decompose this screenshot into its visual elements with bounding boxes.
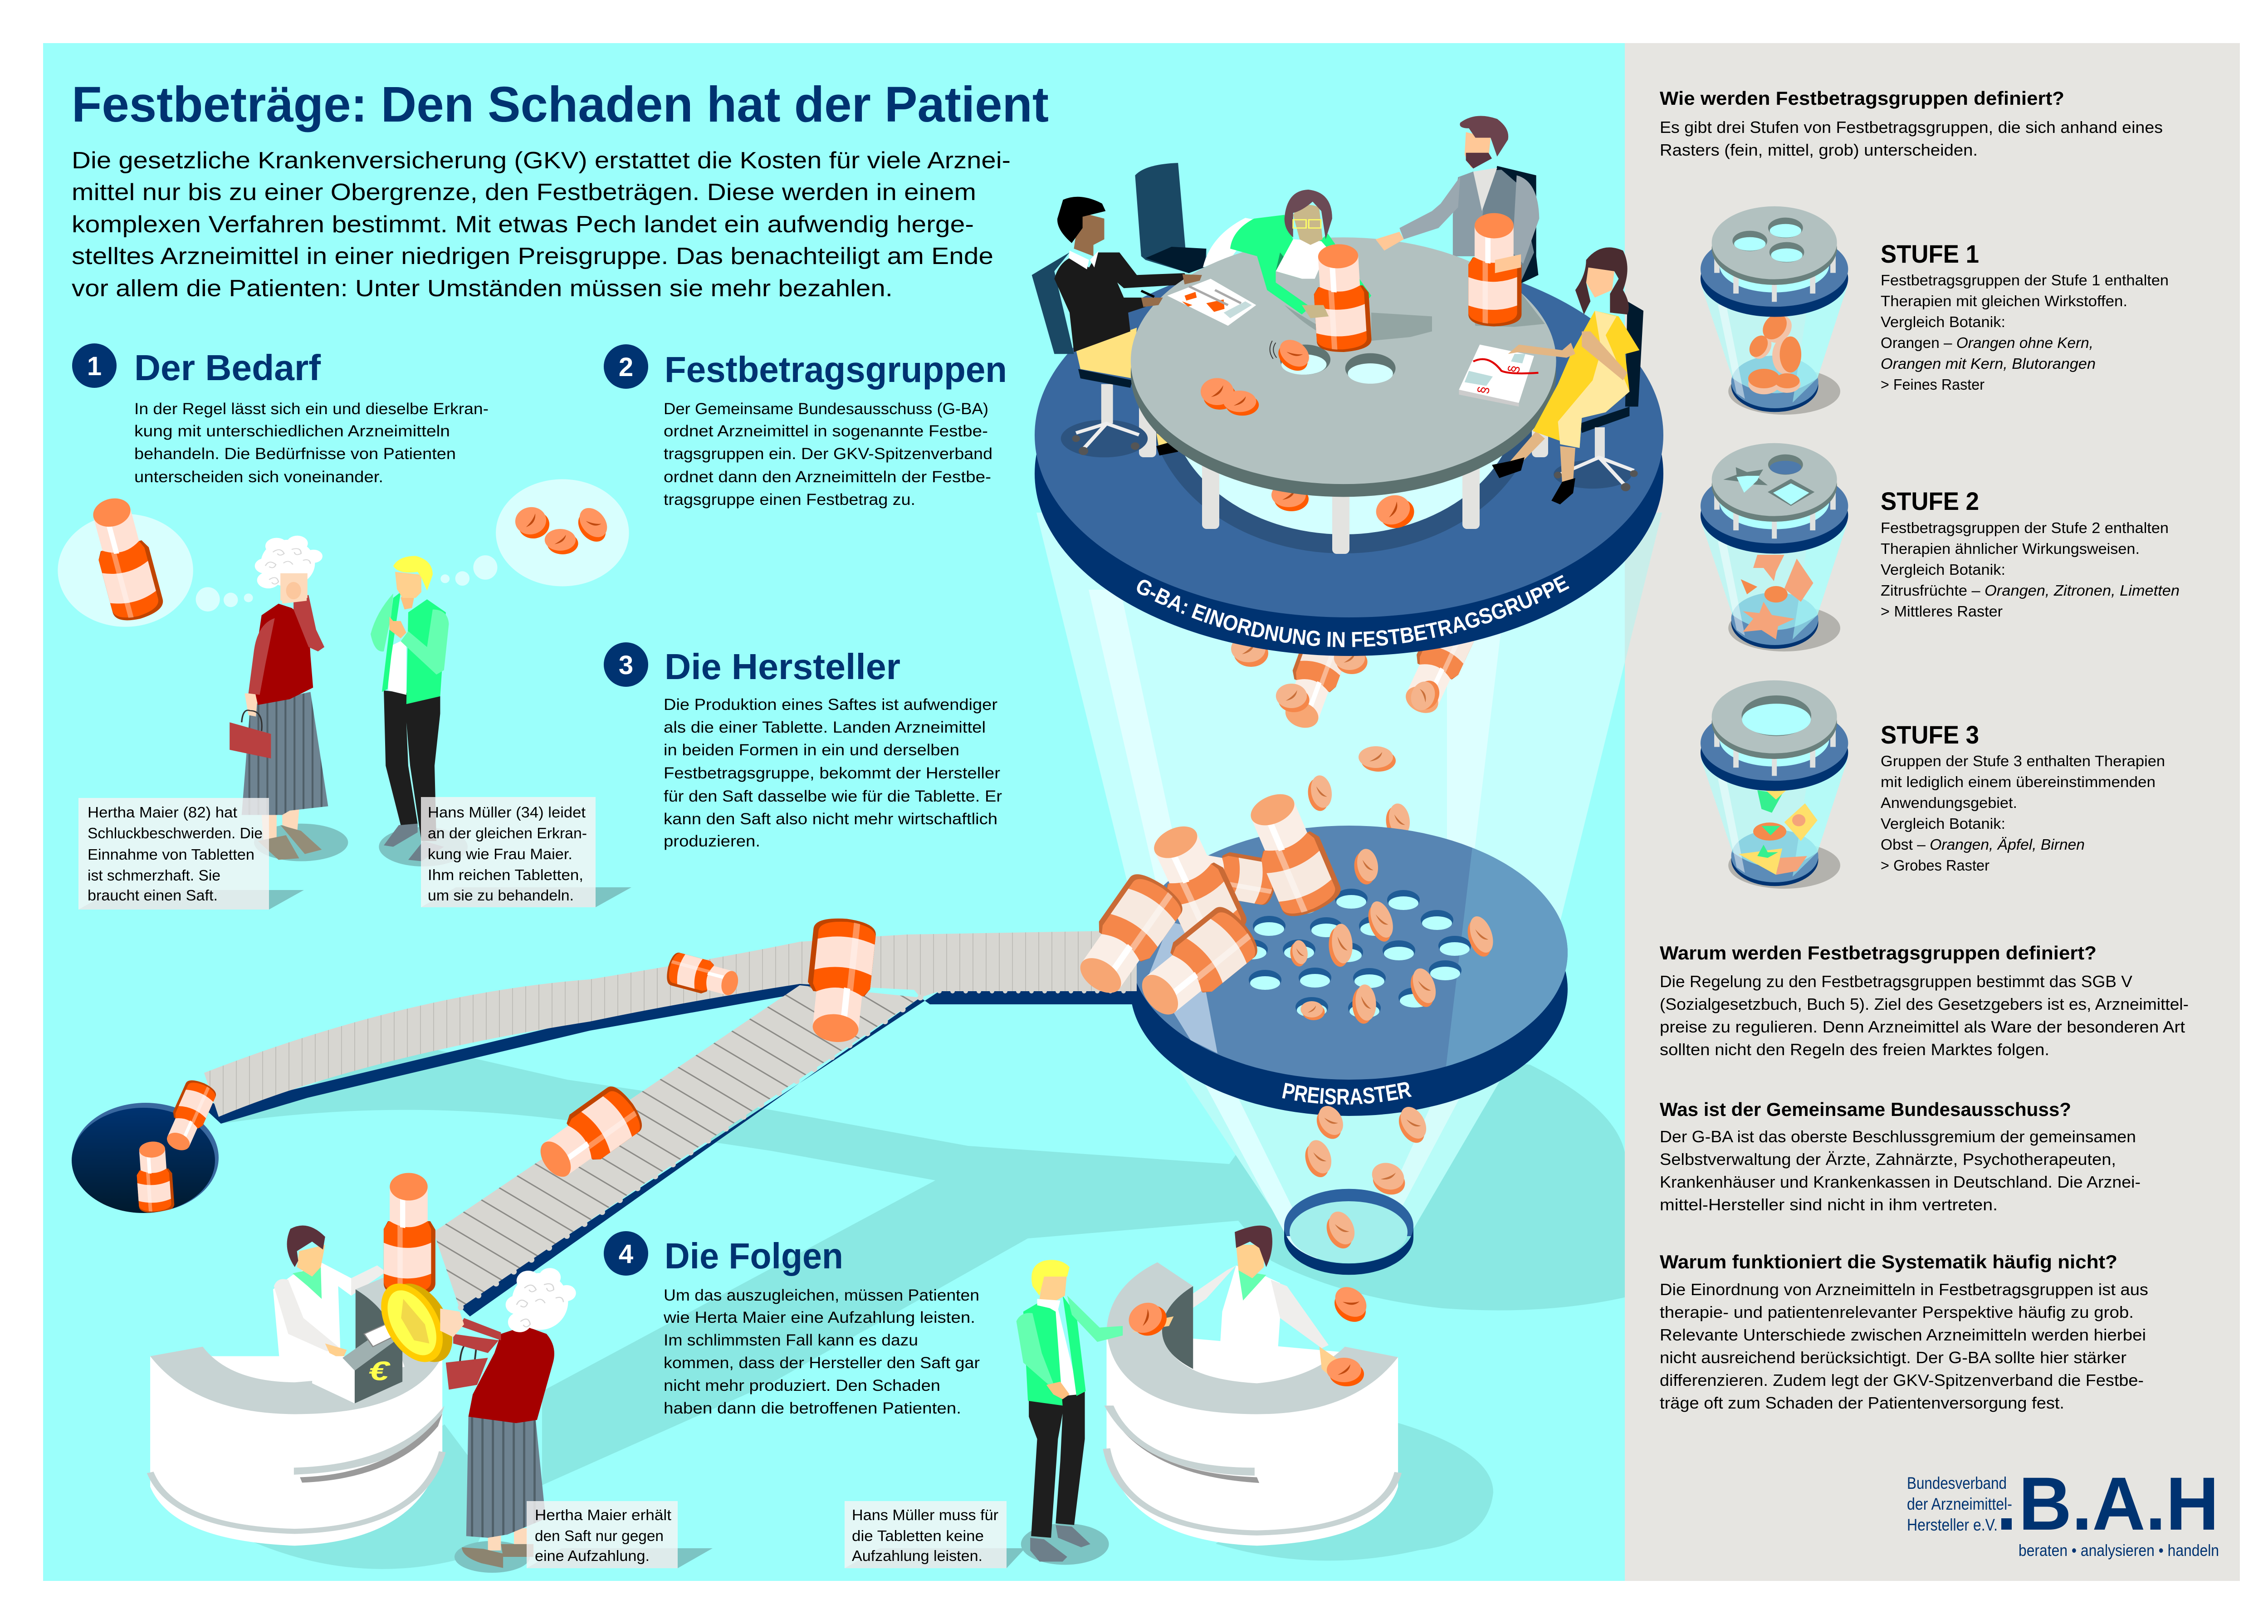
Stufe 3 text: STUFE 3 bbox=[1881, 720, 1979, 749]
Stufe 2 text: STUFE 2 bbox=[1881, 487, 1979, 515]
counter body bbox=[1104, 1262, 1398, 1546]
FAQ: Warum funktioniert: träge oft zum Schaden der Patientenversorgung fest. bbox=[1660, 1394, 2064, 1412]
section 2: Festbetragsgruppen: ordnet dann den Arzneimitteln der Festbe- bbox=[664, 468, 991, 486]
Stufe 3 text: Gruppen der Stufe 3 enthalten Therapien bbox=[1881, 753, 2165, 769]
person: Hertha standing bbox=[230, 536, 348, 861]
tablets below the sieve bbox=[1300, 1101, 1433, 1199]
callout: Hans keine Aufzahlung: Aufzahlung leisten. bbox=[852, 1547, 982, 1564]
FAQ: Was ist der G-BA: Selbstverwaltung der Ärzte, Zahnärzte, Psychotherapeuten, bbox=[1660, 1150, 2116, 1169]
intro text: Die gesetzliche Krankenversicherung (GKV) erstattet die Kosten für viele Arznei- bbox=[72, 147, 1011, 174]
right grey panel bbox=[1625, 43, 2240, 1581]
person: Hans standing bbox=[371, 556, 468, 866]
callout: Hans Müller: Hans Müller (34) leidet bbox=[428, 804, 586, 821]
upper funnel beam bbox=[1036, 513, 1662, 1052]
tablet below ring bbox=[1326, 1281, 1374, 1328]
hands on bottles bbox=[1302, 254, 1521, 318]
section 4: Die Folgen: Im schlimmsten Fall kann es dazu bbox=[664, 1331, 918, 1349]
document on table bbox=[1167, 279, 1256, 326]
coin and Hertha paying bbox=[369, 1268, 576, 1573]
Stufe 2 text: Zitrusfrüchte – Orangen, Zitronen, Limetten bbox=[1881, 582, 2180, 599]
tablets on the sieve bbox=[1288, 847, 1499, 1025]
callout: Hertha Aufzahlung: den Saft nur gegen bbox=[535, 1527, 664, 1544]
section 3: Die Hersteller: 3 bbox=[619, 651, 633, 680]
FAQ: Was ist der G-BA bbox=[1660, 1099, 2141, 1214]
section 2: Festbetragsgruppen bbox=[604, 344, 1007, 509]
belt: diagonal branch bbox=[434, 985, 920, 1308]
right panel intro: Rasters (fein, mittel, grob) unterscheiden. bbox=[1660, 141, 1978, 159]
falling tablets bbox=[1231, 635, 1443, 841]
callout: Hertha Maier bbox=[78, 798, 304, 910]
callout: Hertha Aufzahlung bbox=[527, 1501, 713, 1568]
lower disc: Preisraster bbox=[1130, 817, 1588, 1116]
FAQ: Warum funktioniert: Relevante Unterschiede zwischen Arzneimitteln werden hierbei bbox=[1660, 1326, 2146, 1344]
thought bubble: Hertha bbox=[58, 514, 253, 627]
FAQ: Warum funktioniert: Warum funktioniert die Systematik häufig nicht? bbox=[1660, 1251, 2117, 1272]
intro text bbox=[72, 147, 1011, 302]
Stufe 2 text: Vergleich Botanik: bbox=[1881, 561, 2005, 578]
section 3: Die Hersteller: in beiden Formen in ein und derselben bbox=[664, 741, 959, 759]
callout: Hertha Maier: Hertha Maier (82) hat bbox=[88, 804, 237, 821]
FAQ: Warum funktioniert: nicht ausreichend berücksichtigt. Der G-BA sollte hier stärker bbox=[1660, 1348, 2126, 1367]
thought bubble: Hans bbox=[440, 479, 629, 586]
bottle over counter bbox=[384, 1173, 435, 1296]
law book bbox=[1459, 345, 1538, 406]
callout: Hans Müller bbox=[421, 797, 631, 907]
chair: empty bbox=[1135, 163, 1206, 273]
Stufe 2 text: Therapien ähnlicher Wirkungsweisen. bbox=[1881, 540, 2140, 557]
logo: B.A.H: der Arzneimittel- bbox=[1907, 1495, 2012, 1513]
tablet handed over bbox=[1123, 1296, 1172, 1343]
callout: Hans Müller: an der gleichen Erkran- bbox=[428, 825, 587, 841]
lower funnel beam bbox=[1179, 1071, 1506, 1259]
tablets under the table bbox=[1271, 483, 1418, 533]
callout: Hans keine Aufzahlung: Hans Müller muss für bbox=[852, 1507, 998, 1523]
Stufe 1 text: Orangen mit Kern, Blutorangen bbox=[1881, 355, 2096, 372]
callout: Hertha Maier: Schluckbeschwerden. Die bbox=[88, 825, 263, 841]
person: bearded man bbox=[1399, 116, 1539, 286]
section 1: Der Bedarf: 1 bbox=[87, 352, 102, 381]
Stufe 3 text: Obst – Orangen, Äpfel, Birnen bbox=[1881, 836, 2085, 853]
FAQ: Warum funktioniert bbox=[1660, 1251, 2148, 1412]
right panel intro: Wie werden Festbetragsgruppen definiert? bbox=[1660, 88, 2064, 109]
section 3: Die Hersteller: für den Saft dasselbe wie für die Tablette. Er bbox=[664, 788, 1002, 805]
white chair back bbox=[1203, 218, 1258, 268]
meeting scene bbox=[1032, 116, 1643, 504]
right counter with pharmacist bbox=[1017, 1226, 1398, 1565]
intro text: vor allem die Patienten: Unter Umständen müssen sie mehr bezahlen. bbox=[72, 275, 893, 302]
callout: Hertha Maier: Einnahme von Tabletten bbox=[88, 846, 254, 863]
section 2: Festbetragsgruppen: 2 bbox=[619, 352, 633, 382]
FAQ: Warum funktioniert: therapie- und patientenrelevanter Perspektive häufig zu grob. bbox=[1660, 1303, 2134, 1321]
cash register bbox=[312, 1321, 402, 1404]
collecting ring bbox=[1284, 1189, 1413, 1275]
callout: Hertha Maier: ist schmerzhaft. Sie bbox=[88, 867, 220, 884]
G-BA disc with meeting table bbox=[1035, 245, 1663, 656]
section 4: Die Folgen: Um das auszugleichen, müssen Patienten bbox=[664, 1286, 979, 1304]
section 1: Der Bedarf: behandeln. Die Bedürfnisse von Patienten bbox=[134, 445, 456, 463]
person: pharmacist left bbox=[273, 1225, 386, 1385]
sieve holes bbox=[1235, 889, 1471, 1018]
label: G-BA: G-BA: EINORDNUNG IN FESTBETRAGSGRUPPE bbox=[1132, 571, 1572, 652]
right panel intro bbox=[1660, 88, 2163, 159]
FAQ: Warum werden bbox=[1660, 942, 2189, 1059]
logo: B.A.H: Bundesverband bbox=[1907, 1474, 2007, 1492]
Stufe 2 text: > Mittleres Raster bbox=[1881, 603, 2003, 620]
FAQ: Was ist der G-BA: Krankenhäuser und Krankenkassen in Deutschland. Die Arznei- bbox=[1660, 1173, 2141, 1191]
coin bbox=[369, 1278, 464, 1368]
bottles on the conveyor bbox=[530, 915, 877, 1188]
left counter with pharmacist bbox=[150, 1225, 445, 1546]
section 2: Festbetragsgruppen: tragsgruppen ein. Der GKV-Spitzenverband bbox=[664, 445, 992, 463]
FAQ: Was ist der G-BA: Was ist der Gemeinsame Bundesausschuss? bbox=[1660, 1099, 2071, 1120]
section 4: Die Folgen: Die Folgen bbox=[665, 1236, 843, 1276]
right panel intro: Es gibt drei Stufen von Festbetragsgruppen, die sich anhand eines bbox=[1660, 118, 2163, 137]
callout: Hertha Aufzahlung: eine Aufzahlung. bbox=[535, 1547, 650, 1564]
person: man in black bbox=[1032, 197, 1189, 457]
FAQ: Was ist der G-BA: Der G-BA ist das oberste Beschlussgremium der gemeinsamen bbox=[1660, 1127, 2136, 1146]
icon: Stufe 1 filter bbox=[1701, 206, 1848, 415]
table holes bbox=[1280, 345, 1396, 384]
Stufe 1 text: STUFE 1 bbox=[1881, 240, 1979, 268]
tablet on counter bbox=[1327, 1358, 1364, 1386]
label: Preisraster: PREISRASTER bbox=[1280, 1076, 1413, 1110]
section 3: Die Hersteller: Die Produktion eines Saftes ist aufwendiger bbox=[664, 696, 997, 714]
cash register: € bbox=[368, 1356, 391, 1386]
belt: main section bbox=[871, 930, 1137, 998]
icon: Stufe 3 filter bbox=[1701, 680, 1848, 889]
title: Festbeträge: Den Schaden hat der Patient bbox=[72, 77, 1049, 132]
person: woman in green bbox=[1230, 190, 1371, 314]
Stufe 2 text: Festbetragsgruppen der Stufe 2 enthalten bbox=[1881, 519, 2169, 536]
tablets on the table bbox=[1201, 335, 1317, 416]
bottle cluster on the sieve bbox=[1066, 784, 1345, 1027]
tablets in bubble bbox=[513, 503, 614, 554]
Stufe 1 text bbox=[1881, 240, 2169, 393]
logo: B.A.H: B.A.H bbox=[2019, 1462, 2219, 1546]
fruit shapes bbox=[1739, 790, 1818, 875]
table legs bbox=[1139, 390, 1548, 554]
Stufe 3 text bbox=[1881, 720, 2165, 874]
Stufe 1 text: > Feines Raster bbox=[1881, 376, 1984, 393]
sieve holes bbox=[1723, 455, 1814, 506]
counter body bbox=[150, 1277, 445, 1546]
Stufe 3 text: mit lediglich einem übereinstimmenden bbox=[1881, 773, 2156, 790]
intro text: mittel nur bis zu einer Obergrenze, den Festbeträgen. Diese werden in einem bbox=[72, 179, 976, 205]
section 3: Die Hersteller bbox=[604, 642, 1002, 850]
law book: § bbox=[1505, 364, 1522, 374]
sieve opening bbox=[1741, 695, 1811, 736]
hand with coin bbox=[440, 1308, 464, 1337]
section 2: Festbetragsgruppen: Festbetragsgruppen bbox=[665, 349, 1007, 390]
FAQ: Was ist der G-BA: mittel-Hersteller sind nicht in ihm vertreten. bbox=[1660, 1195, 1998, 1214]
section 4: Die Folgen: nicht mehr produziert. Den Schaden bbox=[664, 1377, 940, 1394]
person: woman in yellow bbox=[1492, 247, 1643, 504]
FAQ: Warum werden: preise zu regulieren. Denn Arzneimittel als Ware der besonderen Art bbox=[1660, 1017, 2185, 1036]
FAQ: Warum werden: Die Regelung zu den Festbetragsgruppen bestimmt das SGB V bbox=[1660, 972, 2132, 991]
Stufe 1 text: Orangen – Orangen ohne Kern, bbox=[1881, 334, 2093, 351]
Stufe 2 text bbox=[1881, 487, 2180, 620]
section 4: Die Folgen: 4 bbox=[619, 1239, 633, 1269]
table bbox=[1131, 237, 1556, 497]
section 4: Die Folgen bbox=[604, 1231, 980, 1417]
section 1: Der Bedarf: unterscheiden sich voneinander. bbox=[134, 468, 383, 486]
conveyor belt bbox=[183, 930, 1139, 1316]
tablets bbox=[1746, 310, 1801, 394]
fruit shapes bbox=[1741, 555, 1813, 640]
section 3: Die Hersteller: Festbetragsgruppe, bekommt der Hersteller bbox=[664, 764, 1000, 782]
logo: B.A.H: Hersteller e.V. bbox=[1907, 1516, 1998, 1534]
intro text: komplexen Verfahren bestimmt. Mit etwas Pech landet ein aufwendig herge- bbox=[72, 211, 974, 238]
callout: Hans keine Aufzahlung: die Tabletten keine bbox=[852, 1527, 984, 1544]
section 1: Der Bedarf bbox=[72, 343, 489, 486]
floor shadows bbox=[221, 1043, 1625, 1569]
section 4: Die Folgen: wie Herta Maier eine Aufzahlung leisten. bbox=[663, 1309, 975, 1326]
callout: Hertha Aufzahlung: Hertha Maier erhält bbox=[535, 1507, 671, 1523]
logo: B.A.H bbox=[1907, 1462, 2219, 1560]
Stufe 3 text: Vergleich Botanik: bbox=[1881, 815, 2005, 832]
belt: left branch bbox=[204, 934, 939, 1117]
Stufe 1 text: Vergleich Botanik: bbox=[1881, 313, 2005, 330]
section 3: Die Hersteller: produzieren. bbox=[664, 832, 760, 850]
Stufe 3 text: > Grobes Raster bbox=[1881, 857, 1989, 874]
FAQ: Warum funktioniert: Die Einordnung von Arzneimitteln in Festbetragsgruppen ist aus bbox=[1660, 1280, 2148, 1299]
left cyan panel bbox=[43, 43, 1625, 1581]
bottle in bubble bbox=[84, 492, 166, 625]
FAQ: Warum funktioniert: differenzieren. Zudem legt der GKV-Spitzenverband die Festbe- bbox=[1660, 1371, 2144, 1389]
section 1: Der Bedarf: kung mit unterschiedlichen Arzneimitteln bbox=[134, 422, 450, 440]
section 3: Die Hersteller: als die einer Tablette. Landen Arzneimittel bbox=[664, 719, 986, 736]
section 2: Festbetragsgruppen: ordnet Arzneimittel in sogenannte Festbe- bbox=[664, 422, 988, 440]
Stufe 3 text: Anwendungsgebiet. bbox=[1881, 794, 2017, 811]
bottle on the table: right bbox=[1468, 213, 1521, 327]
section 4: Die Folgen: haben dann die betroffenen Patienten. bbox=[664, 1399, 961, 1417]
Stufe 1 text: Therapien mit gleichen Wirkstoffen. bbox=[1881, 293, 2127, 309]
callout: Hans Müller: um sie zu behandeln. bbox=[428, 887, 574, 904]
section 1: Der Bedarf: Der Bedarf bbox=[134, 347, 321, 388]
FAQ: Warum werden: Warum werden Festbetragsgruppen definiert? bbox=[1660, 942, 2097, 964]
section 2: Festbetragsgruppen: tragsgruppe einen Festbetrag zu. bbox=[664, 491, 915, 509]
section 4: Die Folgen: kommen, dass der Hersteller den Saft gar bbox=[664, 1354, 980, 1372]
section 3: Die Hersteller: Die Hersteller bbox=[665, 646, 900, 687]
person: pharmacist right bbox=[1167, 1226, 1329, 1385]
hands on table bbox=[1141, 232, 1404, 307]
FAQ: Warum werden: sollten nicht den Regeln des freien Marktes folgen. bbox=[1660, 1040, 2049, 1059]
belt: blue side bbox=[183, 982, 1139, 1316]
sieve holes bbox=[1732, 218, 1804, 262]
bottle on the table: centre bbox=[1311, 243, 1372, 353]
falling bottles under G-BA disc bbox=[1275, 601, 1484, 734]
callout: Hans Müller: Ihm reichen Tabletten, bbox=[428, 866, 583, 883]
section 1: Der Bedarf: In der Regel lässt sich ein und dieselbe Erkran- bbox=[134, 400, 489, 418]
law book: § bbox=[1474, 386, 1492, 395]
callout: Hertha Maier: braucht einen Saft. bbox=[88, 887, 218, 904]
intro text: stelltes Arzneimittel in einer niedrigen Preisgruppe. Das benachteiligt am Ende bbox=[72, 243, 993, 269]
hands and tablets bbox=[1132, 1316, 1338, 1377]
FAQ: Warum werden: (Sozialgesetzbuch, Buch 5). Ziel des Gesetzgebers ist es, Arzneimittel- bbox=[1660, 995, 2189, 1013]
person: Hans at counter bbox=[1017, 1260, 1123, 1565]
hole in the floor bbox=[72, 1076, 219, 1214]
callout: Hans keine Aufzahlung bbox=[845, 1501, 1025, 1568]
logo: B.A.H: beraten • analysieren • handeln bbox=[2019, 1541, 2219, 1560]
icon: Stufe 2 filter bbox=[1701, 443, 1848, 651]
Stufe 1 text: Festbetragsgruppen der Stufe 1 enthalten bbox=[1881, 272, 2169, 289]
callout: Hans Müller: kung wie Frau Maier. bbox=[428, 846, 572, 862]
section 3: Die Hersteller: kann den Saft also nicht mehr wirtschaftlich bbox=[664, 810, 997, 828]
section 2: Festbetragsgruppen: Der Gemeinsame Bundesausschuss (G-BA) bbox=[664, 400, 988, 418]
